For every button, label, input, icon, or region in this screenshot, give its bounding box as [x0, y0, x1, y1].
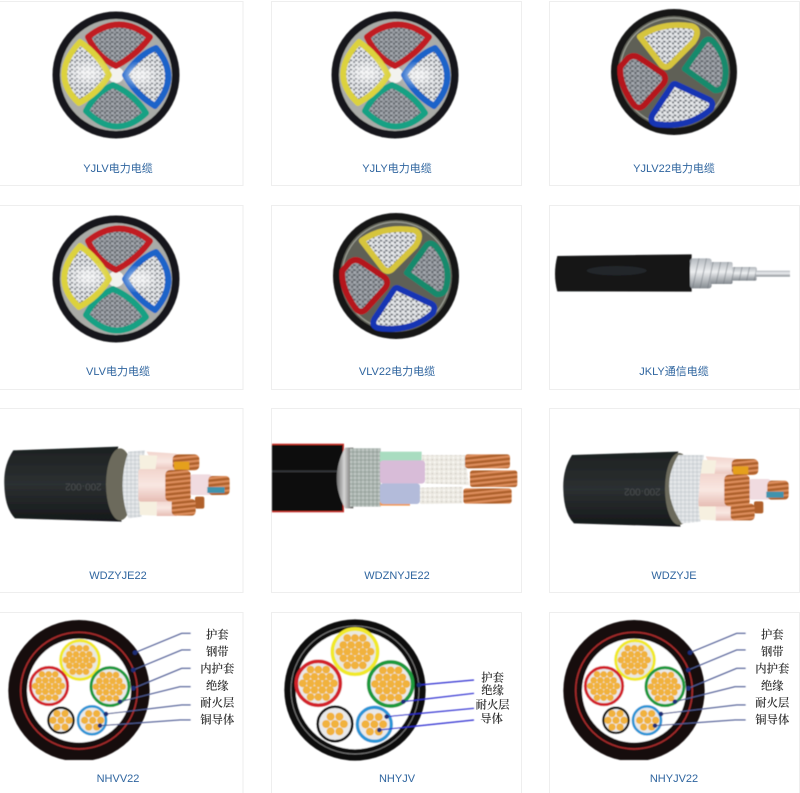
icon: WDZYJE22 stripped cable — [4, 447, 230, 522]
caption: JKLY: JKLY通信电缆 — [639, 365, 709, 378]
caption: NHYJV22: NHYJV22 — [650, 773, 698, 785]
icon: WDZYJE stripped cable — [563, 452, 789, 527]
icon: YJLY cable section — [332, 12, 458, 138]
icon: VLV cable section — [52, 216, 180, 342]
caption: WDZYJE22: WDZYJE22 — [89, 570, 147, 582]
icon: YJLV22 cable section — [611, 9, 737, 135]
icon: JKLY stripped cable — [555, 254, 790, 292]
labels: NHYJV layers: 耐火层 — [476, 697, 510, 711]
diagram: NHYJV cross-section — [284, 619, 510, 761]
labels: NHYJV22 layers — [755, 627, 790, 726]
panel: NHYJV22 — [550, 612, 800, 793]
diagram: NHYJV22 cross-section — [563, 620, 790, 761]
panel: YJLY — [272, 2, 522, 186]
icon: WDZNYJE22 stripped cable — [272, 444, 517, 512]
panel: WDZYJE22 — [0, 408, 243, 592]
panel: YJLV — [0, 2, 243, 186]
caption: WDZYJE: WDZYJE — [651, 570, 697, 582]
panel: NHVV22 — [0, 612, 243, 793]
caption: YJLY: YJLY电力电缆 — [362, 162, 432, 175]
diagram: NHVV22 cross-section — [8, 620, 235, 761]
caption: YJLV22: YJLV22电力电缆 — [633, 162, 715, 175]
panel: WDZNYJE22 — [272, 408, 522, 592]
labels: NHYJV layers — [476, 671, 510, 725]
panel: WDZYJE — [550, 408, 800, 592]
labels: NHYJV layers: 绝缘 — [481, 683, 505, 697]
panel: VLV22 — [272, 206, 522, 390]
caption: NHYJV: NHYJV — [379, 773, 416, 785]
caption: YJLV: YJLV电力电缆 — [83, 162, 153, 175]
caption: WDZNYJE22: WDZNYJE22 — [364, 570, 430, 582]
labels: NHYJV layers: 护套 — [481, 671, 505, 685]
panel: YJLV22 — [550, 2, 800, 186]
icon: VLV22 cable section — [333, 213, 459, 339]
icon: WDZYJE stripped cable: 200·002 — [624, 485, 661, 496]
panel: VLV — [0, 206, 243, 390]
labels: NHVV22 layers — [200, 627, 235, 726]
caption: VLV22: VLV22电力电缆 — [359, 365, 435, 378]
panel: NHYJV — [272, 612, 522, 793]
icon: YJLV cable section — [52, 12, 180, 138]
caption: VLV: VLV电力电缆 — [86, 365, 150, 378]
panel: JKLY — [550, 206, 800, 390]
caption: NHVV22: NHVV22 — [97, 773, 139, 785]
labels: NHYJV layers: 导体 — [480, 711, 504, 725]
icon: WDZYJE22 stripped cable: 200·002 — [65, 480, 102, 491]
